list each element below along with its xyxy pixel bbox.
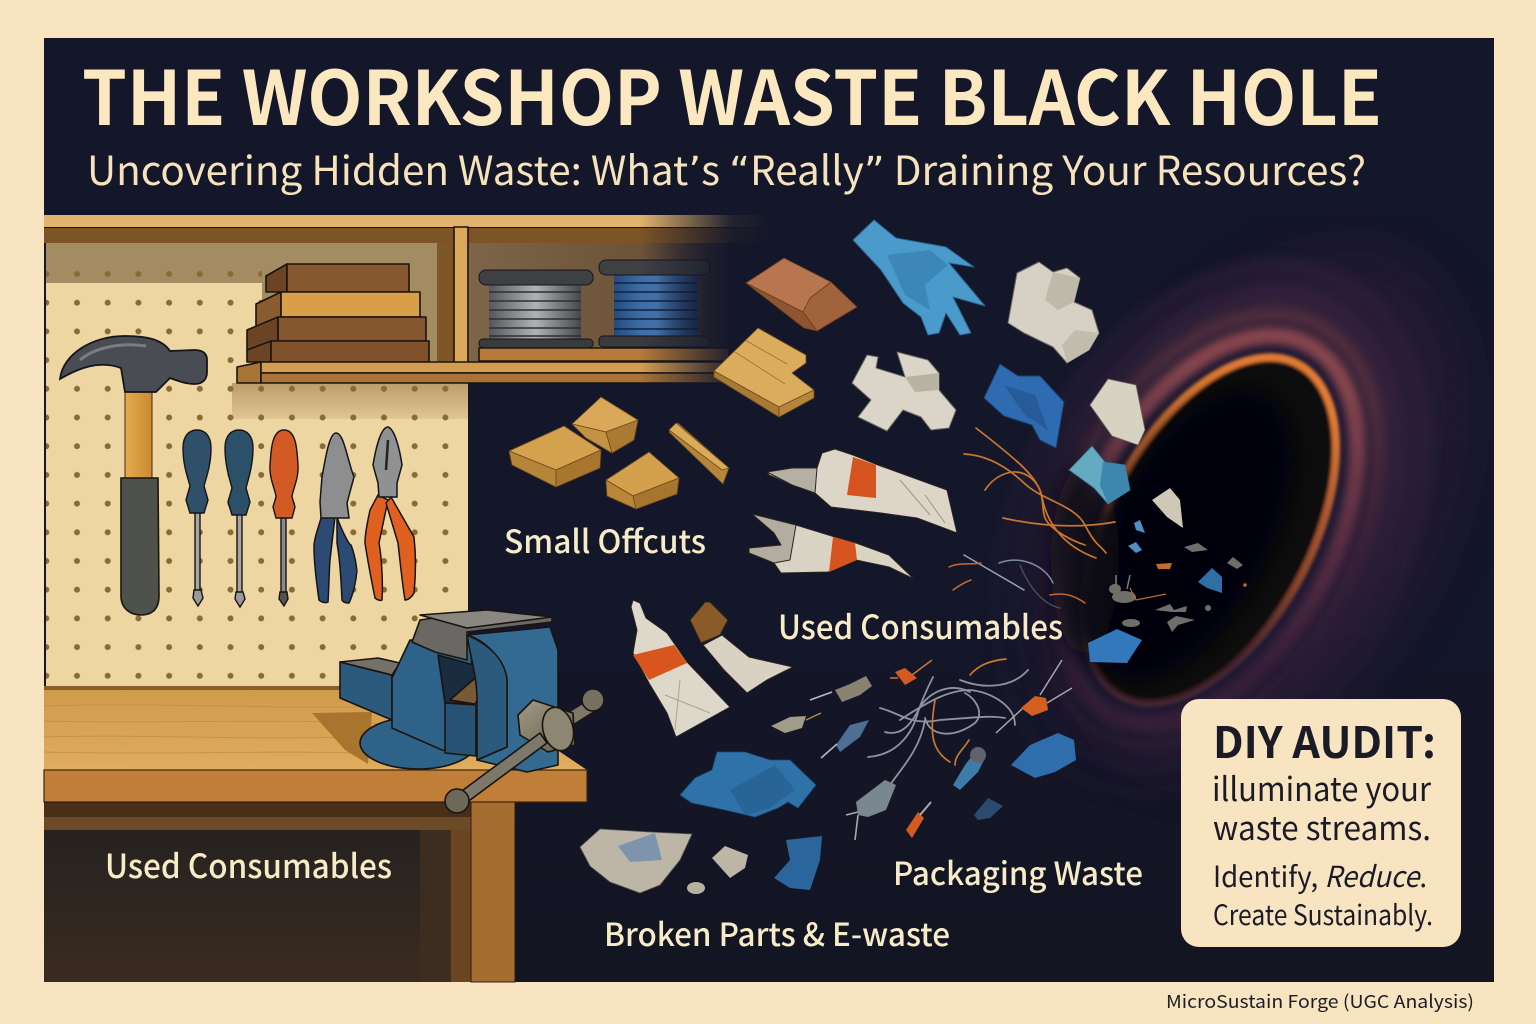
dark top board	[44, 228, 770, 243]
debris being swallowed	[1109, 520, 1247, 632]
teal scrap	[1069, 446, 1130, 504]
shelf board	[237, 362, 735, 383]
white chunk	[1008, 262, 1099, 363]
bench back strip	[44, 686, 468, 691]
bench front edge	[44, 770, 587, 802]
e-waste bits	[810, 692, 832, 700]
paint tube right	[690, 602, 793, 693]
callout line 4: Create Sustainably.	[1213, 894, 1433, 934]
label: broken parts: Broken Parts & E-waste	[604, 910, 950, 956]
vise shadow on bench	[312, 712, 372, 764]
label: used consumables bench: Used Consumables	[105, 840, 392, 888]
under shadow board	[44, 803, 471, 817]
grey bag	[580, 829, 692, 893]
back wall behind shelf	[46, 243, 437, 362]
big blue rag	[680, 752, 816, 817]
small white shard	[1152, 488, 1183, 528]
callout line 1: illuminate your	[1212, 763, 1431, 811]
blue scrap near hole	[1088, 629, 1142, 663]
under-bench dark cavity	[44, 830, 451, 982]
right compartment wall	[468, 243, 728, 363]
pegboard	[46, 259, 468, 688]
title: THE WORKSHOP WASTE BLACK HOLE	[82, 38, 1382, 147]
label: packaging waste: Packaging Waste	[893, 849, 1143, 895]
orange pliers	[365, 427, 416, 600]
silver wire spool	[479, 270, 593, 348]
small rock	[712, 846, 748, 878]
white connector fragment	[852, 352, 956, 431]
small offcuts pile	[509, 397, 729, 509]
footer credit: MicroSustain Forge (UGC Analysis)	[1166, 988, 1474, 1014]
copper block	[746, 258, 857, 331]
vertical divider	[437, 227, 468, 363]
bench grain	[44, 705, 384, 753]
wood stack	[247, 264, 429, 362]
screwdrivers	[183, 430, 298, 607]
hammer	[60, 336, 207, 615]
inner frame	[420, 830, 451, 982]
shelf fade into darkness	[640, 214, 770, 389]
pebble	[687, 882, 705, 894]
blue wire spool	[599, 260, 710, 347]
small lower board	[479, 348, 729, 361]
dark wires cluster	[949, 555, 1085, 608]
workshop shelving	[44, 214, 770, 688]
blue rock right	[1011, 733, 1076, 778]
white rock	[1090, 379, 1145, 445]
blue rag upper	[984, 364, 1064, 448]
side post	[451, 830, 471, 982]
top board	[44, 215, 770, 227]
blue glove	[853, 220, 985, 335]
callout heading: DIY AUDIT:	[1213, 709, 1436, 771]
glue tube lower	[749, 514, 914, 579]
black hole	[1024, 256, 1464, 772]
bench top surface	[44, 690, 587, 770]
central tangled wires and e-waste	[771, 659, 1072, 840]
label: used consumables center: Used Consumables	[778, 601, 1063, 649]
callout: DIY audit	[1181, 699, 1461, 947]
blue pliers	[314, 433, 357, 603]
bench leg	[471, 802, 515, 982]
callout line 2: waste streams.	[1213, 802, 1431, 850]
subtitle: Uncovering Hidden Waste: What’s “Really” Draining Your Resources?	[87, 139, 1366, 197]
under lighter board	[44, 817, 471, 830]
workbench	[44, 686, 587, 982]
orange wires	[964, 428, 1115, 558]
glue tube upper	[767, 449, 957, 533]
callout line 3: Identify, Reduce.	[1213, 854, 1427, 896]
paint tube left	[631, 600, 730, 737]
bench vise	[340, 610, 604, 813]
wood L offcut	[714, 328, 814, 417]
small blue rag	[774, 836, 822, 890]
label: small offcuts: Small Offcuts	[504, 517, 706, 563]
